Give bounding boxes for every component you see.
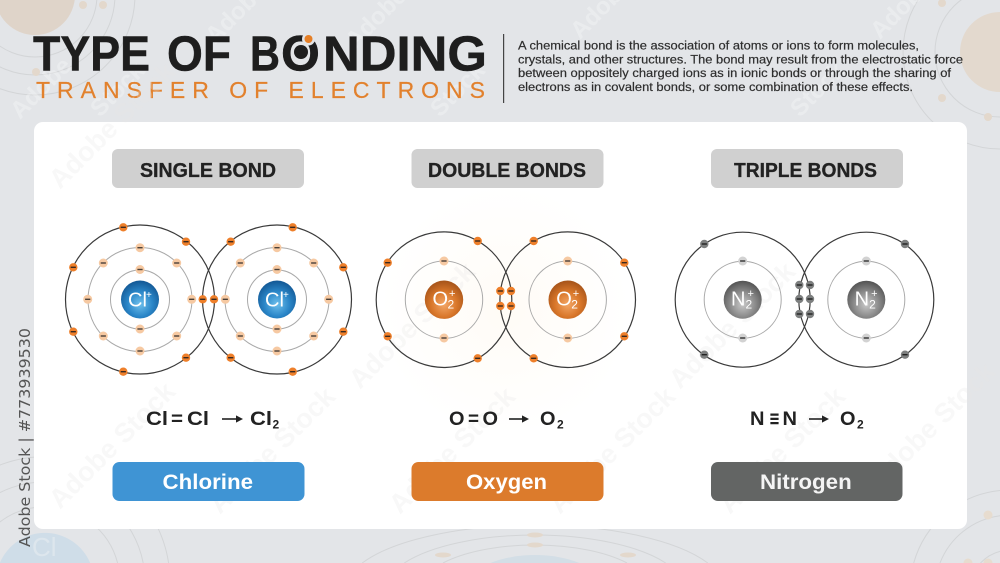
heading: triple bonds (711, 149, 903, 188)
background watermarks: Adobe (5, 52, 77, 124)
equation: oxygen (449, 408, 564, 432)
title: TYPE (33, 28, 150, 82)
label: oxygen: Oxygen (466, 470, 547, 494)
card watermarks: Adobe Stock (543, 381, 682, 519)
atom diagram: oxygen: O (556, 288, 572, 310)
card watermarks: Adobe Stock (713, 381, 852, 519)
atom diagram: oxygen (376, 232, 636, 368)
atom diagram: oxygen: O (432, 288, 448, 310)
faint centre glow (380, 185, 630, 435)
equation: nitrogen: N (750, 408, 764, 430)
description (518, 38, 963, 94)
atom diagram: chlorine: Cl (128, 290, 147, 312)
equation: chlorine: 2 (272, 418, 280, 432)
description: electrons as in covalent bonds, or some combination of these effects. (518, 80, 913, 94)
panel: double bonds (376, 149, 636, 501)
label: chlorine: Chlorine (162, 470, 253, 494)
background watermarks: Stock (785, 56, 851, 122)
label: nitrogen: Nitrogen (760, 470, 852, 494)
heading: double bonds (412, 149, 604, 188)
atom diagram: nitrogen: 2 (746, 298, 752, 312)
heading: single bond (112, 149, 304, 188)
atom diagram: chlorine: Cl (265, 290, 284, 312)
title: NDING (323, 28, 487, 82)
panel: single bond (66, 149, 352, 501)
label: nitrogen (711, 462, 902, 501)
stock id text: Adobe Stock | #773939530 (16, 328, 34, 547)
atom diagram: oxygen: + (449, 288, 455, 300)
atom diagram: nitrogen: 2 (869, 298, 876, 312)
card watermarks: Adobe Stock (863, 356, 1000, 494)
atom diagram: oxygen: 2 (448, 298, 454, 312)
atom diagram: chlorine: + (283, 290, 289, 301)
background atom: top left (0, 0, 135, 95)
background watermarks: Stock (85, 56, 151, 122)
equation: oxygen: 2 (557, 418, 564, 432)
equation: oxygen: O (540, 408, 556, 430)
card watermarks: Adobe Stock (43, 56, 182, 194)
title: OF (167, 28, 231, 82)
equation: chlorine: Cl (146, 408, 168, 430)
atom diagram: nitrogen: N (855, 288, 869, 310)
background atom: bottom left (0, 457, 169, 563)
background atom: top right (903, 0, 1000, 149)
heading: double bonds: DOUBLE BONDS (428, 160, 586, 182)
description: between oppositely charged ions as in ionic bonds or through the sharing of (518, 66, 952, 80)
panel: triple bonds (675, 149, 934, 501)
equation: chlorine: Cl (250, 408, 272, 430)
card watermarks: Adobe Stock (663, 256, 802, 394)
header divider (503, 34, 504, 103)
equation: nitrogen: ≡ (769, 407, 780, 430)
equation: nitrogen: N (782, 408, 797, 430)
equation: nitrogen: O (840, 408, 856, 430)
title: O (281, 26, 320, 82)
background atom: bottom left: Cl (32, 532, 57, 562)
card watermarks (43, 56, 1000, 519)
label: chlorine (112, 462, 304, 501)
background atom: bottom centre (362, 525, 708, 563)
heading: triple bonds: TRIPLE BONDS (734, 160, 877, 182)
card watermarks: Adobe Stock (343, 256, 482, 394)
equation: oxygen: O (449, 408, 464, 430)
atom diagram: chlorine: + (146, 290, 152, 301)
atom diagram: nitrogen: + (871, 288, 878, 300)
description: A chemical bond is the association of atoms or ions to form molecules, (518, 38, 919, 52)
heading: single bond: SINGLE BOND (140, 160, 276, 182)
equation: chlorine: Cl (187, 408, 209, 430)
background watermarks: Stock (425, 56, 491, 122)
atom diagram: nitrogen (675, 232, 934, 367)
atom diagram: nitrogen: + (748, 288, 754, 300)
atom diagram: oxygen: + (573, 288, 579, 300)
title (33, 26, 487, 82)
description: crystals, and other structures. The bond may result from the electrostatic force (518, 52, 963, 66)
equation: chlorine (146, 408, 280, 432)
equation: nitrogen: 2 (857, 418, 864, 432)
equation: oxygen: = (468, 408, 479, 430)
background watermarks (5, 0, 937, 124)
atom diagram: nitrogen: N (731, 288, 745, 310)
atom diagram: chlorine (66, 223, 352, 376)
equation: nitrogen (750, 407, 864, 432)
card watermarks: Adobe Stock (43, 376, 182, 514)
background atom: bottom right (914, 490, 1000, 563)
atom diagram: oxygen: 2 (571, 298, 578, 312)
title: B (250, 28, 280, 82)
main card (34, 122, 967, 529)
card watermarks: Adobe Stock (203, 381, 342, 519)
card watermarks: Adobe Stock (383, 381, 522, 519)
subtitle: TRANSFER OF ELECTRONS (36, 77, 485, 103)
equation: oxygen: O (482, 408, 498, 430)
equation: chlorine: = (171, 408, 183, 430)
label: oxygen (412, 462, 604, 501)
